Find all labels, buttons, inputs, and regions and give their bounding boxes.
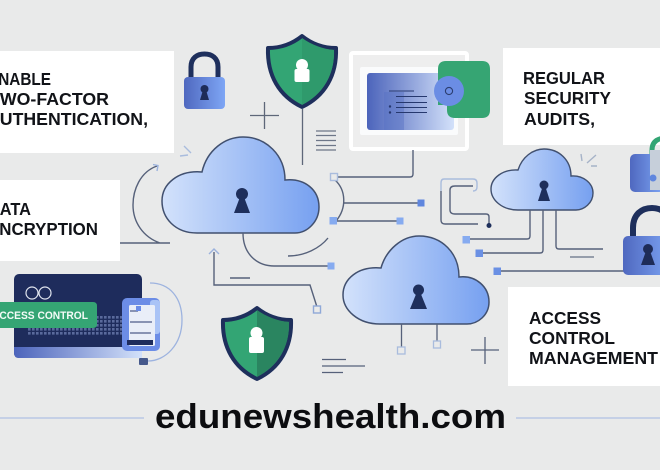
title: website name: edunewshealth.com [155,398,506,436]
panel: regular security audits: SECURITY [524,88,611,108]
panel: access control management [508,287,660,386]
icon: access control card [14,274,182,365]
panel: regular security audits: AUDITS, [524,109,595,129]
connector: shield stem and plus [250,102,336,165]
icon: shield top [268,36,336,107]
connectors: main cloud circuit lines [120,146,424,313]
panel: data encryption [0,180,120,261]
panel: regular security audits [503,48,660,145]
icon: lower cloud [343,236,489,324]
panel: access control management: CONTROL [529,328,615,348]
icon: right cloud [491,149,593,210]
label: access control tag [0,302,97,328]
panel: enable two-factor authentication [0,51,174,153]
icon: padlock right lower [623,208,660,275]
panel: access control management: MANAGEMENT [529,348,658,368]
panel: access control management: ACCESS [529,308,601,328]
icon: monitor with document [351,53,490,149]
icon: padlock top left [184,54,225,109]
connectors: right cloud circuit lines [441,154,625,275]
icon: main cloud [162,137,319,233]
panel: regular security audits: REGULAR [523,68,605,88]
icon: padlock right upper [630,138,660,192]
icon: shield bottom [223,308,291,379]
connectors: lower cloud lines and plus [322,324,499,372]
